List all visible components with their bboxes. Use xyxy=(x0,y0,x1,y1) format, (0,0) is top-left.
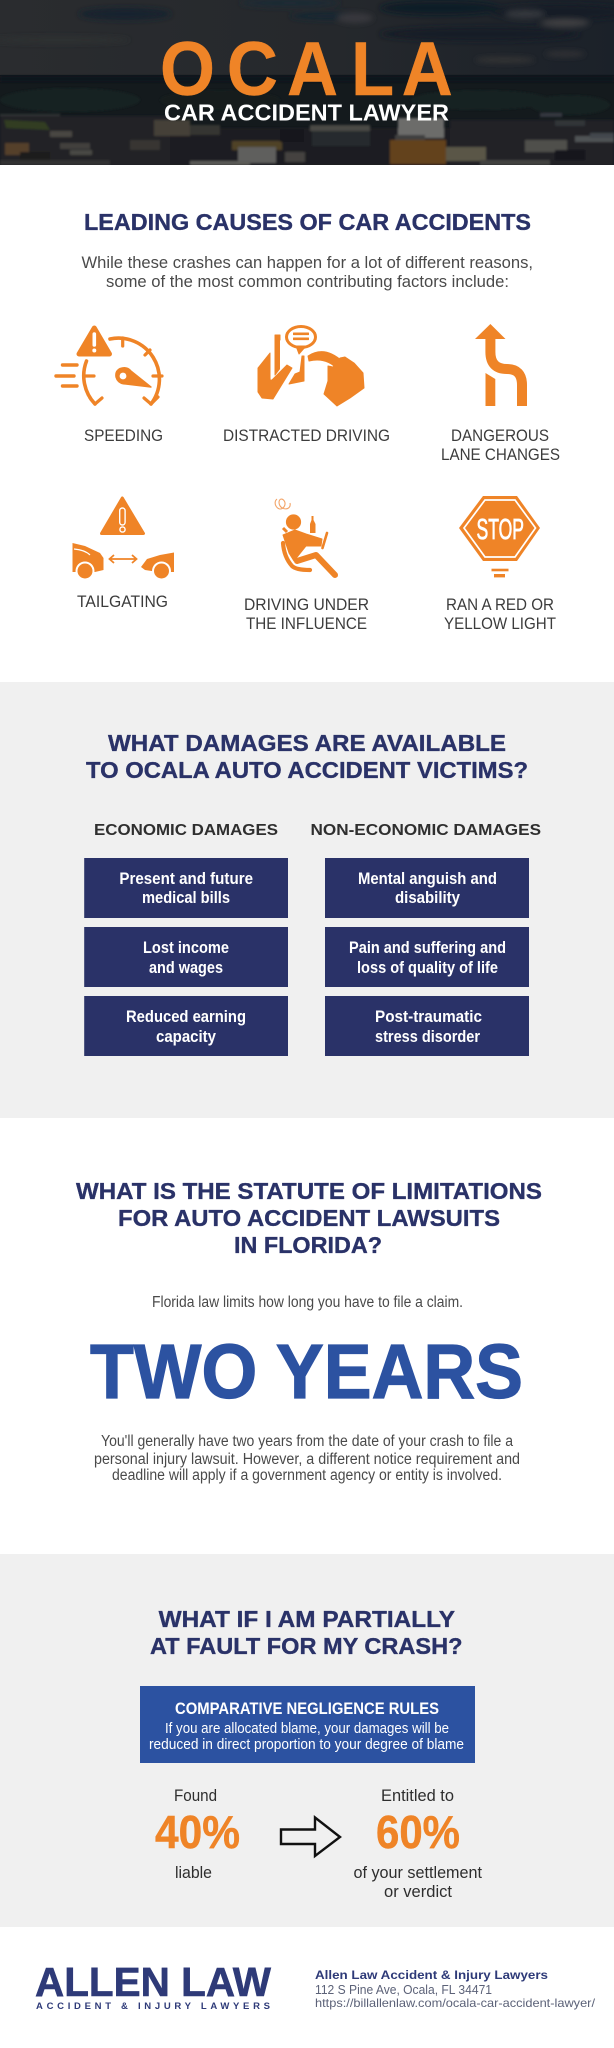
icon: tailgating cars with warning triangle xyxy=(72,498,174,580)
card: mental anguish: Mental anguish and xyxy=(358,870,497,888)
icon: speedometer with warning triangle xyxy=(56,328,162,404)
logo: Allen Law: ALLEN LAW xyxy=(35,1959,271,2005)
big stat: two years: TWO YEARS xyxy=(90,1329,523,1415)
icon: hands with phone and text bubble xyxy=(258,326,364,406)
panel: statute of limitations xyxy=(76,1178,542,1484)
title: OCALA: OCALA xyxy=(160,27,453,112)
card: lost income xyxy=(84,927,288,987)
panel: header banner xyxy=(0,0,614,166)
heading: what damages are available xyxy=(86,730,528,783)
label: ran a red or yellow light: YELLOW LIGHT xyxy=(444,614,556,633)
intro text: some of the most common contributing factors include: xyxy=(106,272,509,291)
text: florida law limits: Florida law limits how long you have to file a claim. xyxy=(152,1294,463,1311)
label: dangerous lane changes: LANE CHANGES xyxy=(441,445,560,464)
label: distracted driving: DISTRACTED DRIVING xyxy=(223,426,390,445)
card: lost income: Lost income xyxy=(143,939,229,957)
column heading: non-economic damages: NON-ECONOMIC DAMAGES xyxy=(310,822,541,839)
icon: merging lane arrow xyxy=(475,324,522,406)
text: two-year explanation: deadline will apply if a government agency or entity is involved. xyxy=(112,1467,502,1484)
icon: stop sign: STOP xyxy=(476,514,524,546)
heading: statute of limitations: IN FLORIDA? xyxy=(234,1232,382,1258)
intro text: While these crashes can happen for a lot of different reasons, xyxy=(82,253,533,272)
text: two-year explanation xyxy=(94,1433,520,1484)
card: reduced earning capacity: capacity xyxy=(156,1028,217,1046)
card: medical bills xyxy=(84,858,288,918)
card: post-traumatic stress: stress disorder xyxy=(375,1028,480,1046)
stat: entitled to 60%: or verdict xyxy=(384,1882,452,1901)
callout: comparative negligence rules: COMPARATIVE NEGLIGENCE RULES xyxy=(175,1699,439,1718)
stat: entitled to 60% xyxy=(354,1786,482,1901)
card: mental anguish: disability xyxy=(395,889,461,907)
label: dangerous lane changes xyxy=(441,426,560,464)
card: pain and suffering: Pain and suffering and xyxy=(349,939,506,957)
label: driving under the influence: DRIVING UNDER xyxy=(244,595,369,614)
heading: partially at fault: WHAT IF I AM PARTIALLY xyxy=(159,1606,455,1632)
panel: partially at fault xyxy=(0,1554,614,1927)
card: reduced earning capacity: Reduced earning xyxy=(126,1008,246,1026)
stat: entitled to 60%: of your settlement xyxy=(354,1863,482,1882)
subtitle: car accident lawyer: CAR ACCIDENT LAWYER xyxy=(164,100,449,126)
intro text xyxy=(82,253,533,291)
heading: what damages are available: TO OCALA AUTO ACCIDENT VICTIMS? xyxy=(86,757,528,783)
icon: drunk driver in seat with bottle xyxy=(275,499,335,575)
callout: comparative negligence rules: If you are allocated blame, your damages will be xyxy=(165,1720,449,1737)
label: driving under the influence xyxy=(244,595,369,633)
stat: found 40% liable: liable xyxy=(175,1863,212,1882)
stat: entitled to 60%: 60% xyxy=(376,1806,460,1858)
callout: comparative negligence rules: reduced in direct proportion to your degree of blame xyxy=(149,1736,464,1753)
label: driving under the influence: THE INFLUENCE xyxy=(246,614,367,633)
label: ran a red or yellow light xyxy=(444,595,556,633)
card: post-traumatic stress xyxy=(325,996,529,1056)
stat: entitled to 60%: Entitled to xyxy=(381,1786,454,1805)
arrow: liable to entitled xyxy=(281,1818,340,1856)
panel: damages available xyxy=(0,682,614,1118)
card: medical bills: Present and future xyxy=(119,870,253,888)
heading: statute of limitations xyxy=(76,1178,542,1258)
heading: leading causes: LEADING CAUSES OF CAR ACCIDENTS xyxy=(84,209,531,235)
heading: statute of limitations: WHAT IS THE STATUTE OF LIMITATIONS xyxy=(76,1178,542,1204)
logo: Allen Law: ACCIDENT & INJURY LAWYERS xyxy=(36,2001,270,2012)
text: two-year explanation: personal injury lawsuit. However, a different notice requirement and xyxy=(94,1451,520,1468)
stat: found 40% liable: Found xyxy=(174,1786,217,1805)
label: speeding: SPEEDING xyxy=(84,426,163,445)
label: ran a red or yellow light: RAN A RED OR xyxy=(446,595,554,614)
card: lost income: and wages xyxy=(149,959,223,977)
text: two-year explanation: You'll generally have two years from the date of your crash to file a xyxy=(101,1433,513,1450)
card: pain and suffering xyxy=(325,927,529,987)
card: pain and suffering: loss of quality of life xyxy=(357,959,498,977)
label: tailgating: TAILGATING xyxy=(77,592,168,611)
contact details xyxy=(315,1968,596,2010)
callout: comparative negligence rules xyxy=(140,1686,475,1763)
card: reduced earning capacity xyxy=(84,996,288,1056)
column heading: economic damages: ECONOMIC DAMAGES xyxy=(94,822,278,839)
icon: stop sign xyxy=(459,496,540,577)
stat: found 40% liable xyxy=(155,1786,240,1882)
card: medical bills: medical bills xyxy=(142,889,230,907)
panel: footer xyxy=(35,1959,596,2012)
heading: what damages are available: WHAT DAMAGES ARE AVAILABLE xyxy=(108,730,506,756)
contact details: 112 S Pine Ave, Ocala, FL 34471 xyxy=(315,1982,492,1997)
heading: partially at fault xyxy=(150,1606,462,1659)
contact details: Allen Law Accident & Injury Lawyers xyxy=(315,1968,548,1982)
heading: partially at fault: AT FAULT FOR MY CRASH? xyxy=(150,1633,462,1659)
heading: statute of limitations: FOR AUTO ACCIDENT LAWSUITS xyxy=(118,1205,500,1231)
label: dangerous lane changes: DANGEROUS xyxy=(451,426,549,445)
banner photo: dusk aerial of Ocala skyline xyxy=(0,0,614,166)
contact details: https://billallenlaw.com/ocala-car-accident-lawyer/ xyxy=(315,1996,596,2010)
panel: leading causes of car accidents xyxy=(56,209,560,633)
stat: found 40% liable: 40% xyxy=(155,1806,240,1858)
card: mental anguish xyxy=(325,858,529,918)
card: post-traumatic stress: Post-traumatic xyxy=(375,1008,482,1026)
